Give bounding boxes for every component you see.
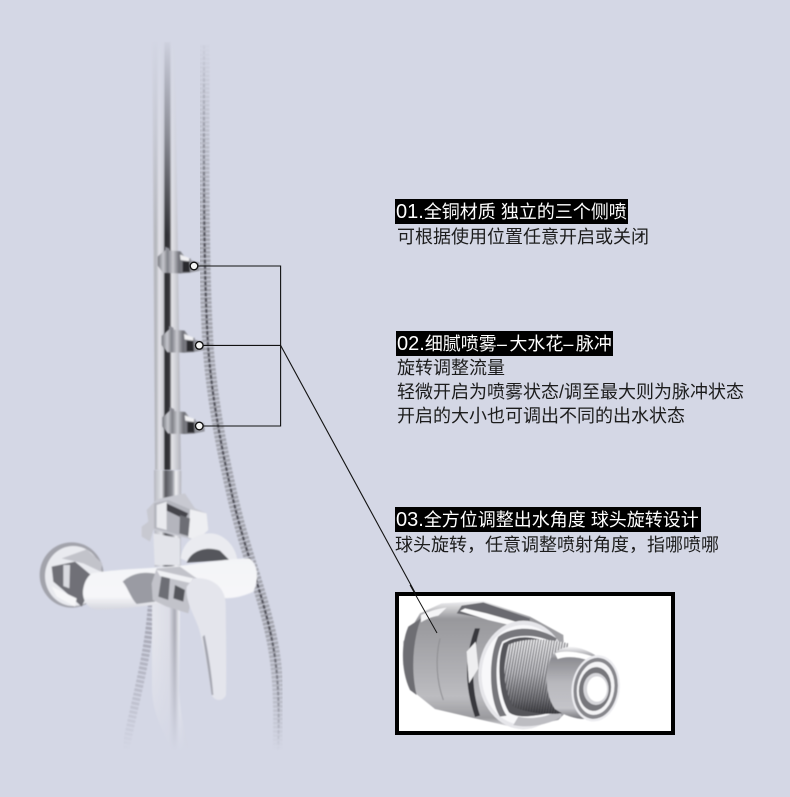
jet 1	[158, 247, 200, 273]
hose left loop	[125, 600, 152, 752]
body reflection	[123, 573, 157, 604]
body 02: 旋转调整流量	[397, 358, 505, 378]
body 02: 开启的大小也可调出不同的出水状态	[397, 406, 685, 426]
leader lines	[194, 266, 437, 633]
fade top	[140, 35, 220, 235]
fade bottom	[110, 630, 300, 765]
rear arc	[181, 533, 237, 563]
jet marker 1	[190, 262, 198, 270]
body 01: 可根据使用位置任意开启或关闭	[397, 227, 649, 247]
heading 03: 03.全方位调整出水角度 球头旋转设计	[396, 509, 699, 531]
tip opening	[587, 676, 607, 702]
wall plate	[40, 542, 104, 608]
close-up photo panel	[397, 585, 673, 733]
feature 01	[395, 199, 649, 247]
heading 02: 02.细腻喷雾–大水花–脉冲	[397, 333, 612, 355]
shower rail and hose illustration	[40, 35, 300, 765]
body 02: 轻微开启为喷雾状态/调至最大则为脉冲状态	[397, 382, 744, 402]
neck	[547, 647, 605, 719]
lever handle	[186, 578, 226, 700]
mixer body	[83, 558, 257, 609]
jet 3	[162, 407, 205, 434]
jet marker 3	[196, 422, 203, 430]
tip ring	[567, 652, 624, 725]
rail upper	[152, 42, 181, 470]
flange ring	[478, 621, 568, 729]
body 02	[397, 358, 744, 426]
ribbed section	[504, 639, 568, 714]
barrel	[403, 601, 567, 728]
pipe collar	[154, 470, 181, 567]
nozzle close-up	[403, 601, 624, 729]
leader over photo	[410, 585, 437, 633]
feature 02	[396, 331, 744, 426]
mixer valve and bracket	[40, 470, 257, 613]
lever hub	[152, 567, 197, 613]
bracket	[142, 493, 208, 565]
jet marker 2	[196, 342, 203, 349]
body 03: 球头旋转，任意调整喷射角度，指哪喷哪	[395, 535, 719, 555]
hose right	[204, 45, 279, 755]
feature 03	[395, 507, 719, 555]
side jets	[158, 247, 205, 434]
rail lower	[152, 600, 190, 752]
heading 01: 01.全铜材质 独立的三个侧喷	[396, 201, 627, 223]
jet 2	[162, 326, 204, 353]
